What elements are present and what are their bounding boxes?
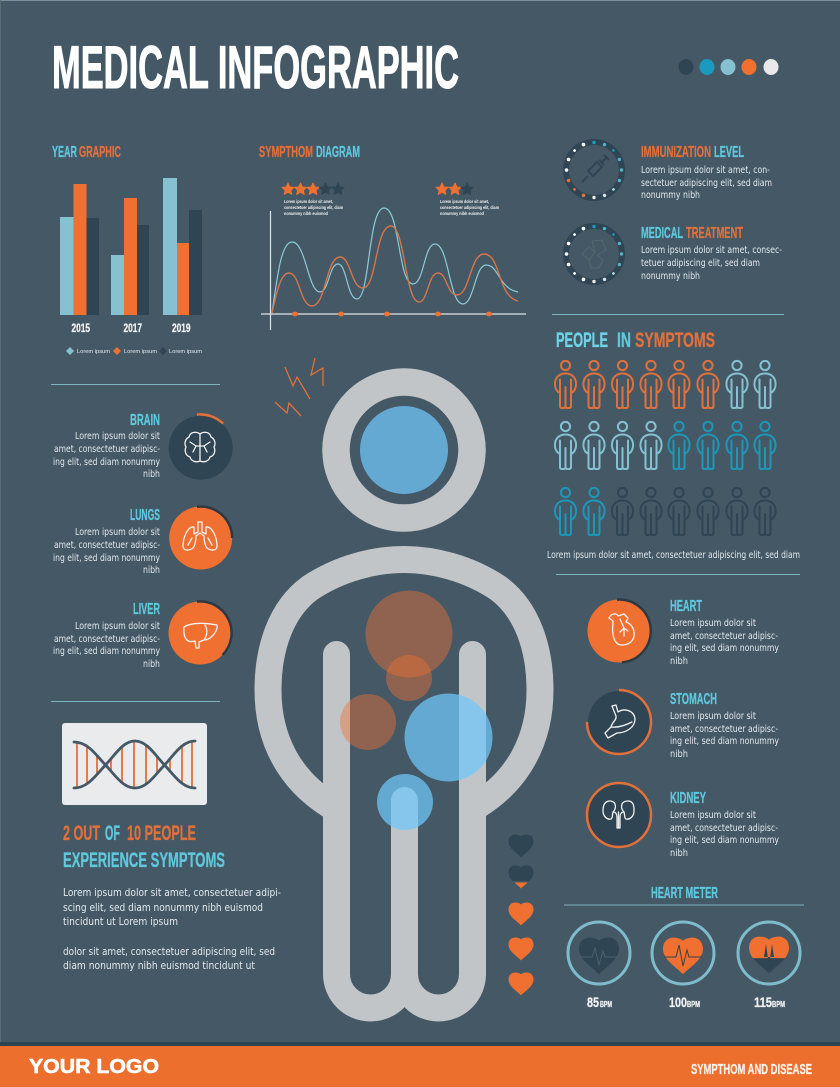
icon: treatment ring — [565, 225, 623, 283]
bar chart: 2017 — [124, 323, 142, 335]
treatment text: nonummy nibh — [641, 271, 700, 282]
organ: heart: ing elit, sed diam nonummy — [670, 643, 779, 654]
symptoms paragraph: diam nonummy nibh euismod tincidunt ut — [63, 960, 255, 972]
pictogram: people — [555, 361, 776, 535]
organ: kidney: amet, consectetuer adipisc- — [670, 823, 778, 834]
DNA card — [62, 723, 207, 805]
meter: 115 bpm — [738, 922, 800, 1010]
organ: stomach: ing elit, sed diam nonummy — [670, 736, 779, 747]
meter: 85 bpm: BPM — [600, 1000, 612, 1009]
immunization text: IMMUNIZATION — [641, 144, 711, 161]
chart notes: consectetuer adipiscing elit, diam — [284, 205, 343, 210]
symptoms heading: 10 PEOPLE — [127, 822, 196, 845]
organ: brain — [53, 412, 233, 480]
symptoms paragraph: scing elit, sed diam nonummy nibh euismod — [63, 902, 263, 914]
immunization text: nonummy nibh — [641, 190, 700, 201]
organ: lungs: nibh — [143, 565, 160, 576]
human figure — [268, 382, 540, 1008]
treatment text: tetuer adipiscing elit, sed diam — [641, 258, 760, 269]
organ: lungs — [53, 506, 232, 576]
organ: stomach: amet, consectetuer adipisc- — [670, 724, 778, 735]
heading: people in symptoms: PEOPLE — [556, 329, 608, 352]
immunization text: LEVEL — [714, 144, 744, 161]
title: MEDICAL INFOGRAPHIC — [52, 34, 459, 101]
treatment text: TREATMENT — [686, 225, 743, 242]
chart notes: consectetuer adipiscing elit, diam — [440, 205, 499, 210]
meter: 100 bpm — [652, 922, 714, 1010]
organ: brain: Lorem ipsum dolor sit — [75, 431, 160, 442]
bar chart — [60, 178, 202, 335]
footer — [0, 1042, 840, 1087]
organ: liver: Lorem ipsum dolor sit — [75, 621, 160, 632]
palette dots — [678, 59, 778, 75]
organ: lungs: Lorem ipsum dolor sit — [75, 527, 160, 538]
symptoms heading: 2 OUT — [63, 822, 100, 845]
immunization text: Lorem ipsum dolor sit amet, con- — [641, 165, 770, 176]
footer logo: YOUR LOGO — [29, 1055, 159, 1078]
meter: 100 bpm: BPM — [687, 1000, 700, 1009]
figure head — [336, 382, 472, 518]
organ: liver: nibh — [143, 659, 160, 670]
organ: lungs: amet, consectetuer adipisc- — [54, 540, 160, 551]
organ: brain: ing elit, sed diam nonummy — [53, 457, 160, 468]
immunization text: sectetuer adipiscing elit, sed diam — [641, 178, 772, 189]
chart notes: Lorem ipsum dolor sit amet, — [440, 199, 489, 204]
immunization text — [641, 144, 772, 201]
chart legend: Lorem ipsum — [169, 349, 202, 355]
organ: liver — [53, 601, 232, 670]
organ: kidney: Lorem ipsum dolor sit — [670, 810, 756, 821]
chart legend — [66, 347, 202, 355]
organ: stomach: STOMACH — [670, 691, 717, 708]
organ: lungs: LUNGS — [130, 507, 160, 524]
symptoms paragraph — [63, 887, 281, 972]
symptoms paragraph: tincidunt ut Lorem ipsum — [63, 916, 178, 928]
treatment text: Lorem ipsum dolor sit amet, consec- — [641, 245, 782, 256]
organ: kidney: nibh — [670, 848, 688, 859]
heart meter heading: HEART METER — [651, 885, 718, 902]
lightning bolts — [275, 358, 323, 416]
heading: year graphic: GRAPHIC — [79, 144, 121, 161]
symptoms heading: OF — [105, 822, 120, 845]
chart notes: nonummy nibh euismod — [440, 211, 484, 216]
line chart — [261, 208, 526, 330]
heading: symptom diagram: DIAGRAM — [316, 144, 360, 161]
star ratings — [282, 183, 473, 194]
organ: kidney: KIDNEY — [670, 790, 706, 807]
bar chart: 2019 — [172, 323, 190, 335]
heading: year graphic — [52, 144, 121, 161]
meter: 100 bpm: 100 — [669, 994, 687, 1010]
heart column — [508, 834, 534, 996]
bar chart: 2015 — [72, 323, 90, 335]
treatment text: MEDICAL — [641, 225, 683, 242]
symptoms heading — [63, 822, 225, 872]
icon: immunization ring — [565, 141, 623, 199]
chart legend: Lorem ipsum — [77, 349, 110, 355]
organ: heart — [588, 598, 779, 667]
figure body — [268, 560, 540, 1008]
dividers — [51, 314, 804, 905]
chart legend: Lorem ipsum — [124, 349, 157, 355]
meter: 115 bpm: BPM — [772, 1000, 785, 1009]
organ: stomach: nibh — [670, 749, 688, 760]
heading: people in symptoms: IN — [617, 329, 631, 352]
heading: symptom diagram: SYMPTHOM — [259, 144, 313, 161]
organ: liver: LIVER — [133, 601, 160, 618]
symptoms paragraph: dolor sit amet, consectetuer adipiscing elit, sed — [63, 946, 275, 958]
organ: lungs: ing elit, sed diam nonummy — [53, 553, 160, 564]
meter: 115 bpm: 115 — [754, 994, 772, 1010]
organ: brain: amet, consectetuer adipisc- — [54, 444, 160, 455]
organ: heart: nibh — [670, 656, 688, 667]
organ: stomach — [587, 690, 779, 760]
organ: kidney: ing elit, sed diam nonummy — [670, 835, 779, 846]
organ: heart: Lorem ipsum dolor sit — [670, 618, 756, 629]
organ: liver: amet, consectetuer adipisc- — [54, 634, 160, 645]
heading: year graphic: YEAR — [52, 144, 77, 161]
symptoms paragraph: Lorem ipsum dolor sit amet, consectetuer adipi- — [63, 887, 281, 899]
heading: people in symptoms: SYMPTOMS — [635, 329, 715, 352]
organ: heart: amet, consectetuer adipisc- — [670, 631, 778, 642]
meter: 85 bpm — [568, 922, 630, 1010]
organ circles — [340, 590, 492, 830]
meter: 85 bpm: 85 — [587, 994, 599, 1010]
heading: people in symptoms — [556, 329, 715, 352]
chart notes: Lorem ipsum dolor sit amet, — [284, 199, 333, 204]
organ: kidney — [587, 783, 779, 859]
treatment text — [641, 225, 782, 282]
organ: stomach: Lorem ipsum dolor sit — [670, 711, 756, 722]
organ: liver: ing elit, sed diam nonummy — [53, 646, 160, 657]
symptoms heading: EXPERIENCE SYMPTOMS — [63, 849, 225, 872]
chart notes: nonummy nibh euismod — [284, 211, 328, 216]
organ: brain: BRAIN — [130, 412, 160, 429]
organ: brain: nibh — [143, 469, 160, 480]
organ: heart: HEART — [670, 598, 702, 615]
chart notes — [284, 199, 499, 216]
